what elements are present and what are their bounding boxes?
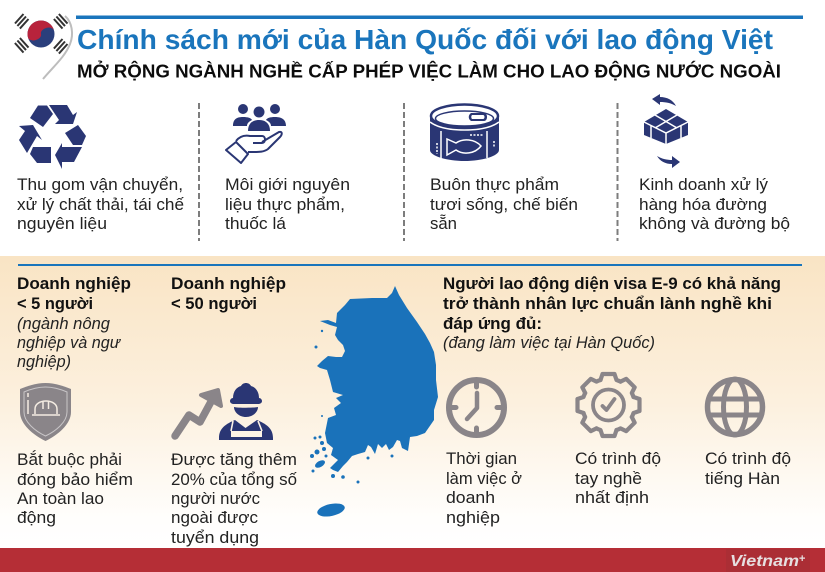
text: 20 percent increase: 20% của tổng số [171,470,298,489]
text: seafood trade: sẵn [430,214,457,233]
text: mandatory insurance: đóng bảo hiểm [17,470,133,489]
footer band [0,548,825,572]
text: freight handling: không và đường bộ [639,214,790,233]
text: under 50 employees: Doanh nghiệp [171,274,286,293]
text: working time: doanh [446,488,495,507]
text: under 5 employees: Doanh nghiệp [17,274,131,293]
text: under 5 employees [17,274,131,371]
text: freight handling: Kinh doanh xử lý [639,175,769,194]
text: under 50 employees: < 50 người [171,294,257,313]
text: brokers: Môi giới nguyên [225,175,350,194]
text: freight handling [639,175,790,233]
map: South Korea [310,286,438,519]
text: working time: làm việc ở [446,469,522,488]
text: brokers: thuốc lá [225,214,287,233]
text: skill level [575,449,661,507]
icon: gear with check [578,374,640,436]
text: under 50 employees [171,274,286,313]
icon: fish can [430,104,499,161]
text: 20 percent increase: người nước [171,489,260,508]
text: waste collection: nguyên liệu [17,214,107,233]
icon: safety shield [20,383,71,441]
text: under 5 employees: nghiệp) [17,352,71,371]
text: Korean language: Có trình độ [705,449,791,468]
text: brokers [225,175,350,233]
text: skill level: nhất định [575,488,649,507]
text: E-9 visa conditions: Người lao động diện visa E-9 có khả năng [443,274,781,293]
text: Korean language [705,449,791,488]
text: waste collection [17,175,185,233]
logo: Vietnam+: Vietnam [730,553,799,570]
text: mandatory insurance: Bắt buộc phải [17,450,122,469]
text: under 5 employees: < 5 người [17,294,93,313]
text: working time [446,449,522,527]
text: seafood trade: tươi sống, chế biến [430,195,578,214]
text: E-9 visa conditions [443,274,781,352]
text: mandatory insurance: An toàn lao [17,489,104,508]
text: skill level: Có trình độ [575,449,661,468]
text: Korean language: tiếng Hàn [705,469,780,488]
panel: lower background [0,256,825,548]
text: mandatory insurance [17,450,133,527]
text: mandatory insurance: động [17,508,56,527]
text: E-9 visa conditions: trở thành nhân lực chuẩn lành nghề khi [443,294,772,313]
title: Chính sách mới của Hàn Quốc đối với lao động Việt [77,24,773,55]
text: 20 percent increase: tuyển dụng [171,528,259,547]
lower rule [18,264,802,266]
text: waste collection: Thu gom vận chuyển, [17,175,183,194]
text: E-9 visa conditions: (đang làm việc tại Hàn Quốc) [443,333,655,352]
text: under 5 employees: nghiệp và ngư [17,333,121,352]
icon: Korean flag pin [15,14,72,79]
text: working time: Thời gian [446,449,517,468]
logo: Vietnam+: + [799,553,805,565]
text: seafood trade [430,175,578,233]
text: freight handling: hàng hóa đường [639,195,767,214]
title rule [76,16,803,19]
icon: clock [449,380,504,435]
text: 20 percent increase: ngoài được [171,508,258,527]
logo: Vietnam+ [726,549,810,572]
subtitle: MỞ RỘNG NGÀNH NGHỀ CẤP PHÉP VIỆC LÀM CHO LAO ĐỘNG NƯỚC NGOÀI [77,60,781,82]
icon: rotating parcel [644,94,688,168]
icon: construction worker [219,383,273,440]
text: E-9 visa conditions: đáp ứng đủ: [443,314,542,333]
text: waste collection: xử lý chất thải, tái chế [17,195,185,214]
icon: people in hand [226,104,286,163]
text: 20 percent increase [171,450,298,547]
icon: recycling arrows [19,105,86,169]
text: skill level: tay nghề [575,469,642,488]
icon: rising arrow [175,390,221,436]
text: seafood trade: Buôn thực phẩm [430,175,559,194]
text: under 5 employees: (ngành nông [17,314,111,333]
icon: globe [708,379,762,435]
text: brokers: liệu thực phẩm, [225,195,345,214]
text: 20 percent increase: Được tăng thêm [171,450,297,469]
text: working time: nghiệp [446,508,500,527]
